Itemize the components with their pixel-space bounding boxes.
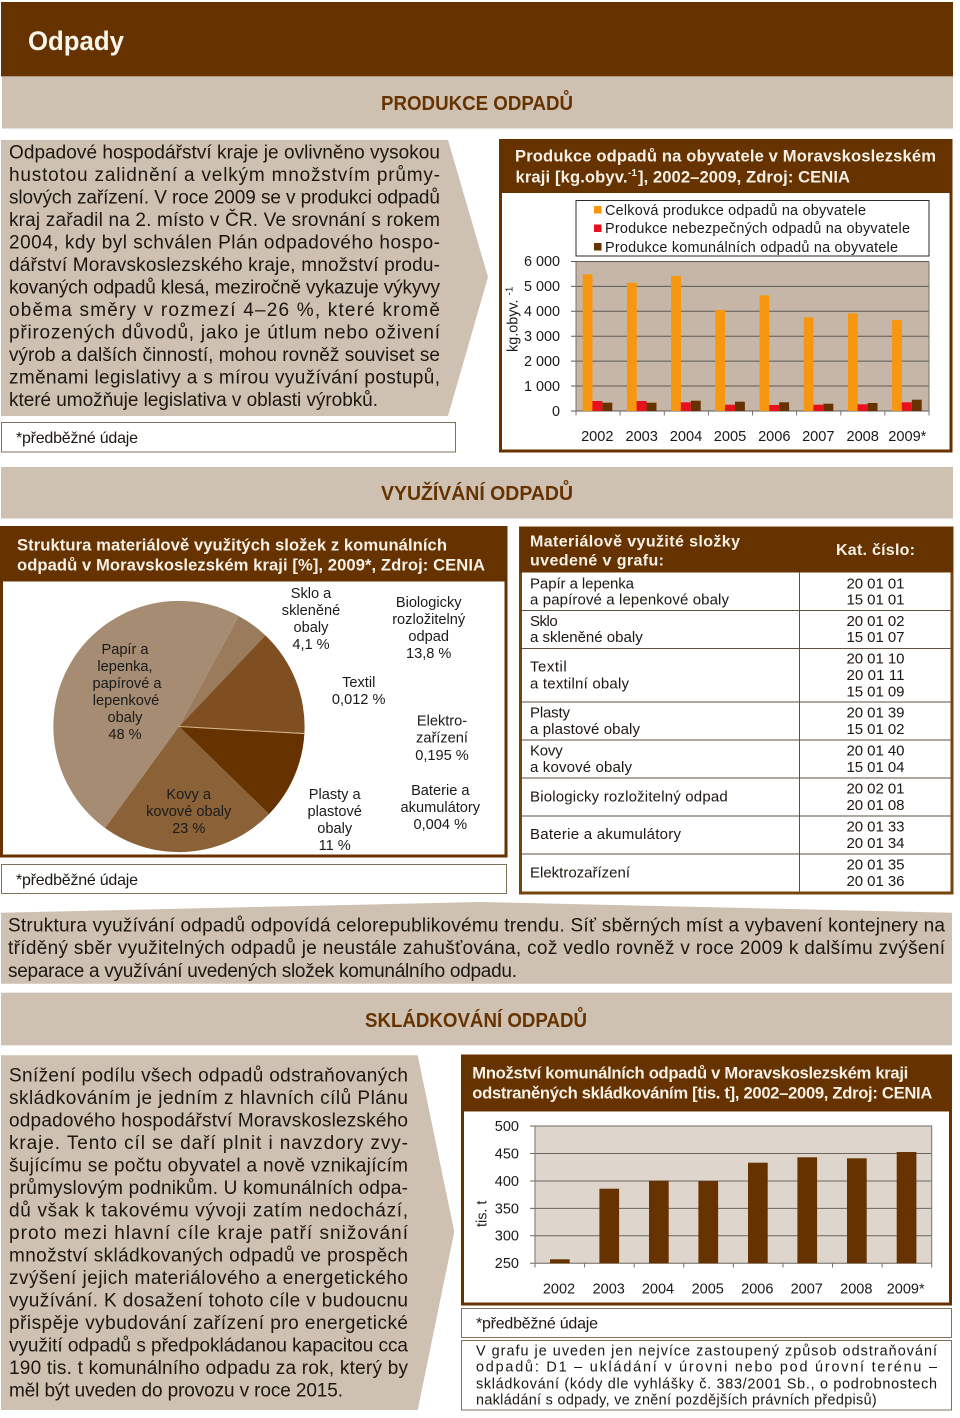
x axis labels	[581, 429, 927, 445]
pie label: papír: obaly	[108, 710, 143, 726]
table row: plasty: Plasty	[530, 705, 570, 722]
pie label: papír: Papír a	[101, 642, 149, 658]
note box: vysvětlivka D1: skládkování (kódy dle vyhlášky č. 383/2001 Sb., o podrobnostech	[476, 1376, 937, 1392]
x axis labels: 2006	[758, 429, 791, 445]
table row: biologický odpad: 20 01 08	[846, 797, 904, 814]
table row: plasty	[530, 705, 904, 738]
text arrow panel: skládkování	[1, 1055, 454, 1410]
pie slice: papír	[53, 601, 239, 828]
y axis labels: 250	[495, 1256, 519, 1272]
pie slice: biologický odpad	[179, 635, 305, 733]
y axis labels: 4 000	[524, 304, 560, 320]
pie label: textil	[332, 675, 385, 708]
y axis labels: 5 000	[524, 279, 560, 295]
x axis labels: 2004	[642, 1281, 674, 1297]
text arrow panel: produkce: dářství Moravskoslezského kraje, množství produ-	[9, 255, 440, 276]
chart title	[472, 1063, 932, 1102]
pie label: textil: Textil	[342, 675, 375, 691]
table row: textil	[530, 650, 904, 701]
table row: elektrozařízení: 20 01 35	[846, 856, 904, 873]
x axis labels: 2005	[692, 1281, 724, 1297]
table row: kovy	[530, 742, 904, 776]
text arrow panel: skládkování: proto mezi hlavní cíle kraje patří snižování	[9, 1223, 409, 1244]
text arrow panel: produkce: přirozených důvodů, jako je útlum nebo oživení	[9, 322, 441, 344]
table row: plasty: 20 01 39	[846, 705, 904, 722]
red bars: nebezpečné odpady	[592, 401, 912, 411]
table row: kovy: Kovy	[530, 742, 563, 760]
y axis labels: 300	[495, 1229, 519, 1245]
table row: plasty: a plastové obaly	[530, 721, 640, 738]
table row: textil: 20 01 11	[846, 667, 904, 684]
footnote box: struktura	[2, 864, 506, 894]
pie label: plasty: obaly	[317, 821, 353, 837]
section heading: využívání odpadů	[1, 467, 953, 518]
table row: sklo: Sklo	[530, 613, 558, 630]
text arrow panel: produkce: výrob a dalších činností, mohou rovněž souviset se	[9, 345, 440, 366]
y axis labels: 400	[495, 1174, 519, 1190]
text arrow panel: produkce: kovaných odpadů klesá, meziročně vykazuje výkyvy	[9, 278, 440, 298]
orange bars: celková produkce	[583, 274, 902, 411]
text arrow panel: skládkování: zvýšení jejich materiálového a energetického	[9, 1268, 408, 1289]
text arrow panel: produkce	[1, 140, 488, 416]
table row: textil: Textil	[530, 659, 567, 676]
pie label: biologický odpad: Biologicky	[396, 595, 462, 611]
y axis title: kg.obyv.	[506, 299, 522, 352]
pie slice: sklo	[179, 616, 265, 726]
x axis labels: 2007	[791, 1281, 823, 1297]
chart title: odstraněných skládkováním [tis. t], 2002–2009, Zdroj: CENIA	[472, 1083, 932, 1102]
y axis labels: 6 000	[524, 254, 560, 270]
text arrow panel: skládkování: 190 tis. t komunálního odpadu za rok, který by	[9, 1358, 408, 1379]
pie label: baterie: akumulátory	[401, 800, 481, 816]
table row: papír	[530, 575, 904, 608]
plot area with gridlines	[571, 262, 929, 416]
footnote box: struktura: *předběžné údaje	[16, 872, 138, 889]
chart panel: struktura složek	[0, 526, 507, 856]
chart legend: Produkce komunálních odpadů na obyvatele	[605, 240, 898, 256]
x axis labels: 2006	[741, 1281, 773, 1297]
y axis labels	[524, 254, 560, 420]
note box: vysvětlivka D1: nakládání s odpady, ve znění pozdějších právních předpisů)	[476, 1392, 877, 1408]
x axis labels: 2009*	[888, 429, 927, 445]
text band: struktura využívání: tříděný sběr využitelných odpadů je neustále zahušťována, což vedlo rovněž v roce 2009 k dalšímu zvýšení	[8, 938, 946, 959]
y axis labels: 500	[495, 1119, 519, 1135]
text arrow panel: produkce: oběma směry v rozmezí 4–26 %, které kromě	[9, 300, 440, 321]
y axis labels: 3 000	[524, 329, 560, 345]
text arrow panel: produkce: hustotou zalidnění a velkým množstvím průmy-	[9, 165, 440, 186]
chart panel: skládkování	[461, 1054, 952, 1304]
table row: sklo: 15 01 07	[846, 629, 904, 646]
text arrow panel: produkce: změnami legislativy a s mírou využívání postupů,	[9, 368, 440, 388]
pie slice: textil a elektrozařízení	[179, 726, 304, 734]
table row: baterie: Baterie a akumulátory	[530, 826, 682, 843]
pie label: kovy: Kovy a	[166, 787, 212, 803]
plot area with gridlines	[530, 1126, 932, 1268]
table: katalogová čísla	[520, 527, 953, 893]
pie label: sklo: obaly	[294, 620, 329, 636]
text arrow panel: produkce: slových zařízení. V roce 2009 se v produkci odpadů	[9, 188, 440, 208]
pie label: papír: lepenkové	[93, 693, 159, 709]
brown bars: komunální odpady	[602, 400, 922, 411]
table header: uvedené v grafu:	[530, 553, 664, 570]
x axis labels: 2005	[714, 429, 746, 445]
table row: textil: a textilní obaly	[530, 675, 630, 692]
pie label: baterie: Baterie a	[411, 783, 470, 799]
pie label: kovy: kovové obaly	[146, 804, 232, 820]
table row: papír: a papírové a lepenkové obaly	[530, 591, 730, 608]
text arrow panel: produkce: Odpadové hospodářství kraje je ovlivněno vysokou	[9, 142, 440, 164]
chart title	[515, 147, 936, 187]
text arrow panel: skládkování: skládkováním je jedním z hlavních cílů Plánu	[9, 1088, 408, 1109]
pie label: papír: 48 %	[108, 727, 142, 743]
text arrow panel: skládkování: množství skládkovaných odpadů ve prospěch	[9, 1246, 408, 1267]
x axis labels: 2003	[625, 429, 658, 445]
table row: biologický odpad	[530, 780, 904, 814]
table row: sklo: 20 01 02	[846, 613, 904, 630]
y axis labels	[495, 1119, 519, 1272]
pie label: elektrozařízení: Elektro-	[417, 714, 467, 730]
text band: struktura využívání: Struktura využívání odpadů odpovídá celorepublikovému trendu. Síť sběrných míst a vybavení kontejnery na	[8, 916, 945, 937]
text arrow panel: skládkování: přispěje vybudování zařízení pro energetické	[9, 1313, 408, 1334]
text arrow panel: skládkování: využívání. K dosažení tohoto cíle v budoucnu	[9, 1291, 408, 1312]
pie label: biologický odpad	[392, 595, 466, 662]
pie label: plasty: Plasty a	[309, 787, 362, 803]
table row: papír: 15 01 01	[846, 591, 904, 608]
footnote box: skládkování: *předběžné údaje	[476, 1315, 598, 1332]
pie slice: plasty	[179, 726, 304, 814]
pie label: sklo: 4,1 %	[292, 637, 330, 653]
text arrow panel: skládkování: Snížení podílu všech odpadů odstraňovaných	[9, 1066, 408, 1087]
pie label: papír: papírové a	[93, 676, 162, 692]
pie label: sklo: skleněné	[282, 603, 340, 619]
note box: vysvětlivka D1: V grafu je uveden jen nejvíce zastoupený způsob odstraňování	[476, 1344, 937, 1360]
table header	[530, 534, 915, 570]
section heading: využívání odpadů: VYUŽÍVÁNÍ ODPADŮ	[381, 479, 573, 505]
pie label: plasty: plastové	[308, 804, 362, 820]
table row: plasty: 15 01 02	[846, 721, 904, 738]
text arrow panel: skládkování: kraje. Tento cíl se daří plnit i navzdory zvy-	[9, 1133, 408, 1154]
chart legend	[576, 200, 929, 256]
section heading: produkce odpadů	[2, 77, 953, 128]
chart title: ], 2002–2009, Zdroj: CENIA	[638, 168, 850, 187]
header banner	[1, 2, 953, 76]
pie label: elektrozařízení: zařízení	[416, 730, 468, 746]
section heading: produkce odpadů: PRODUKCE ODPADŮ	[381, 89, 573, 115]
pie label: sklo	[282, 586, 340, 653]
pie label: elektrozařízení	[415, 714, 469, 764]
bars: skládkované odpady	[550, 1152, 916, 1263]
pie label: plasty: 11 %	[319, 838, 351, 854]
pie label: biologický odpad: rozložitelný	[392, 612, 466, 628]
x axis labels: 2008	[840, 1281, 872, 1297]
pie label: papír: lepenka,	[97, 659, 153, 675]
table row: kovy: a kovové obaly	[530, 759, 632, 776]
x axis labels	[543, 1281, 925, 1297]
text arrow panel: produkce: které umožňuje legislativa v oblasti výrobků.	[9, 390, 378, 411]
chart title: Množství komunálních odpadů v Moravskoslezském kraji	[472, 1063, 908, 1082]
y axis labels: 1 000	[524, 379, 560, 395]
text arrow panel: skládkování: průmyslovým podnikům. U komunálních odpa-	[9, 1178, 408, 1199]
x axis labels: 2003	[593, 1281, 625, 1297]
chart title: Struktura materiálově využitých složek z komunálních	[17, 536, 447, 555]
section heading: skládkování odpadů: SKLÁDKOVÁNÍ ODPADŮ	[365, 1006, 587, 1032]
pie label: papír	[93, 642, 162, 743]
pie label: kovy	[146, 787, 232, 837]
y axis labels: 2 000	[524, 354, 560, 370]
pie label: plasty	[308, 787, 362, 854]
x axis labels: 2009*	[887, 1281, 925, 1297]
table row: textil: 20 01 10	[846, 650, 904, 667]
pie label: textil: 0,012 %	[332, 692, 385, 708]
table row: papír: 20 01 01	[846, 575, 904, 592]
table row: kovy: 15 01 04	[846, 759, 904, 776]
chart legend: Celková produkce odpadů na obyvatele	[605, 203, 866, 219]
text arrow panel: produkce: kraj zařadil na 2. místo v ČR. Ve srovnání s rokem	[9, 209, 440, 231]
x axis labels: 2002	[581, 429, 614, 445]
table row: sklo: a skleněné obaly	[530, 629, 643, 646]
pie label: biologický odpad: odpad	[408, 629, 449, 645]
table row: textil: 15 01 09	[846, 684, 904, 701]
chart title: -1	[628, 168, 637, 179]
pie label: biologický odpad: 13,8 %	[406, 646, 451, 662]
table row: elektrozařízení: 20 01 36	[846, 873, 904, 890]
y axis labels: 450	[495, 1147, 519, 1163]
pie label: baterie	[401, 783, 481, 833]
footnote box: skládkování	[462, 1308, 952, 1338]
pie label: baterie: 0,004 %	[414, 817, 467, 833]
text arrow panel: skládkování: využití odpadů s předpokládanou kapacitou cca	[9, 1336, 408, 1357]
x axis labels: 2004	[670, 429, 702, 445]
table row: baterie: 20 01 34	[846, 835, 904, 852]
chart title: Produkce odpadů na obyvatele v Moravskoslezském	[515, 147, 936, 166]
y axis labels: 350	[495, 1201, 519, 1217]
x axis labels: 2008	[846, 429, 879, 445]
pie label: sklo: Sklo a	[291, 586, 332, 602]
text band: struktura využívání: separace a využívání uvedených složek komunálního odpadu.	[8, 961, 517, 982]
pie slice: kovy	[105, 726, 269, 852]
table header: Materiálově využité složky	[530, 534, 740, 551]
table row: biologický odpad: 20 02 01	[846, 780, 904, 797]
chart legend: Produkce nebezpečných odpadů na obyvatele	[605, 221, 910, 237]
table row: papír: Papír a lepenka	[530, 575, 635, 592]
chart title: kraji [kg.obyv.	[516, 168, 628, 187]
chart panel: produkce odpadů na obyvatele	[499, 139, 952, 451]
header banner: Odpady	[28, 26, 124, 56]
text arrow panel: produkce: 2004, kdy byl schválen Plán odpadového hospo-	[9, 232, 440, 254]
text arrow panel: skládkování: dů však k takovému vývoji zatím nedochází,	[9, 1201, 408, 1222]
text arrow panel: skládkování: odpadového hospodářství Moravskoslezského	[9, 1111, 408, 1132]
y axis title: tis. t	[474, 1201, 490, 1227]
table row: sklo	[530, 613, 904, 646]
y axis labels: 0	[552, 404, 560, 420]
chart title	[17, 536, 485, 575]
table header: Kat. číslo:	[836, 542, 915, 559]
table row: biologický odpad: Biologicky rozložitelný odpad	[530, 789, 728, 806]
footnote box: produkce: *předběžné údaje	[16, 430, 138, 447]
text arrow panel: skládkování: měl být uveden do provozu v roce 2015.	[9, 1381, 343, 1402]
note box: vysvětlivka D1	[462, 1340, 952, 1410]
text arrow panel: skládkování: šujícímu se počtu obyvatel a nově vznikajícím	[9, 1156, 408, 1177]
x axis labels: 2007	[802, 429, 835, 445]
pie label: elektrozařízení: 0,195 %	[415, 748, 469, 764]
section heading: skládkování odpadů	[1, 993, 952, 1045]
table row: elektrozařízení: Elektrozařízení	[530, 865, 631, 882]
table row: elektrozařízení	[530, 856, 904, 890]
footnote box: produkce	[2, 422, 456, 452]
table row: kovy: 20 01 40	[846, 742, 904, 760]
chart title: odpadů v Moravskoslezském kraji [%], 2009*, Zdroj: CENIA	[17, 556, 485, 575]
x axis labels: 2002	[543, 1281, 575, 1297]
text band: struktura využívání	[1, 902, 952, 984]
y axis title: -1	[504, 286, 516, 295]
pie chart	[53, 601, 305, 852]
table row: baterie	[530, 818, 904, 852]
note box: vysvětlivka D1: odpadů: D1 – ukládání v úrovni nebo pod úrovní terénu –	[476, 1360, 937, 1376]
pie label: kovy: 23 %	[172, 821, 205, 837]
table row: baterie: 20 01 33	[846, 818, 904, 835]
